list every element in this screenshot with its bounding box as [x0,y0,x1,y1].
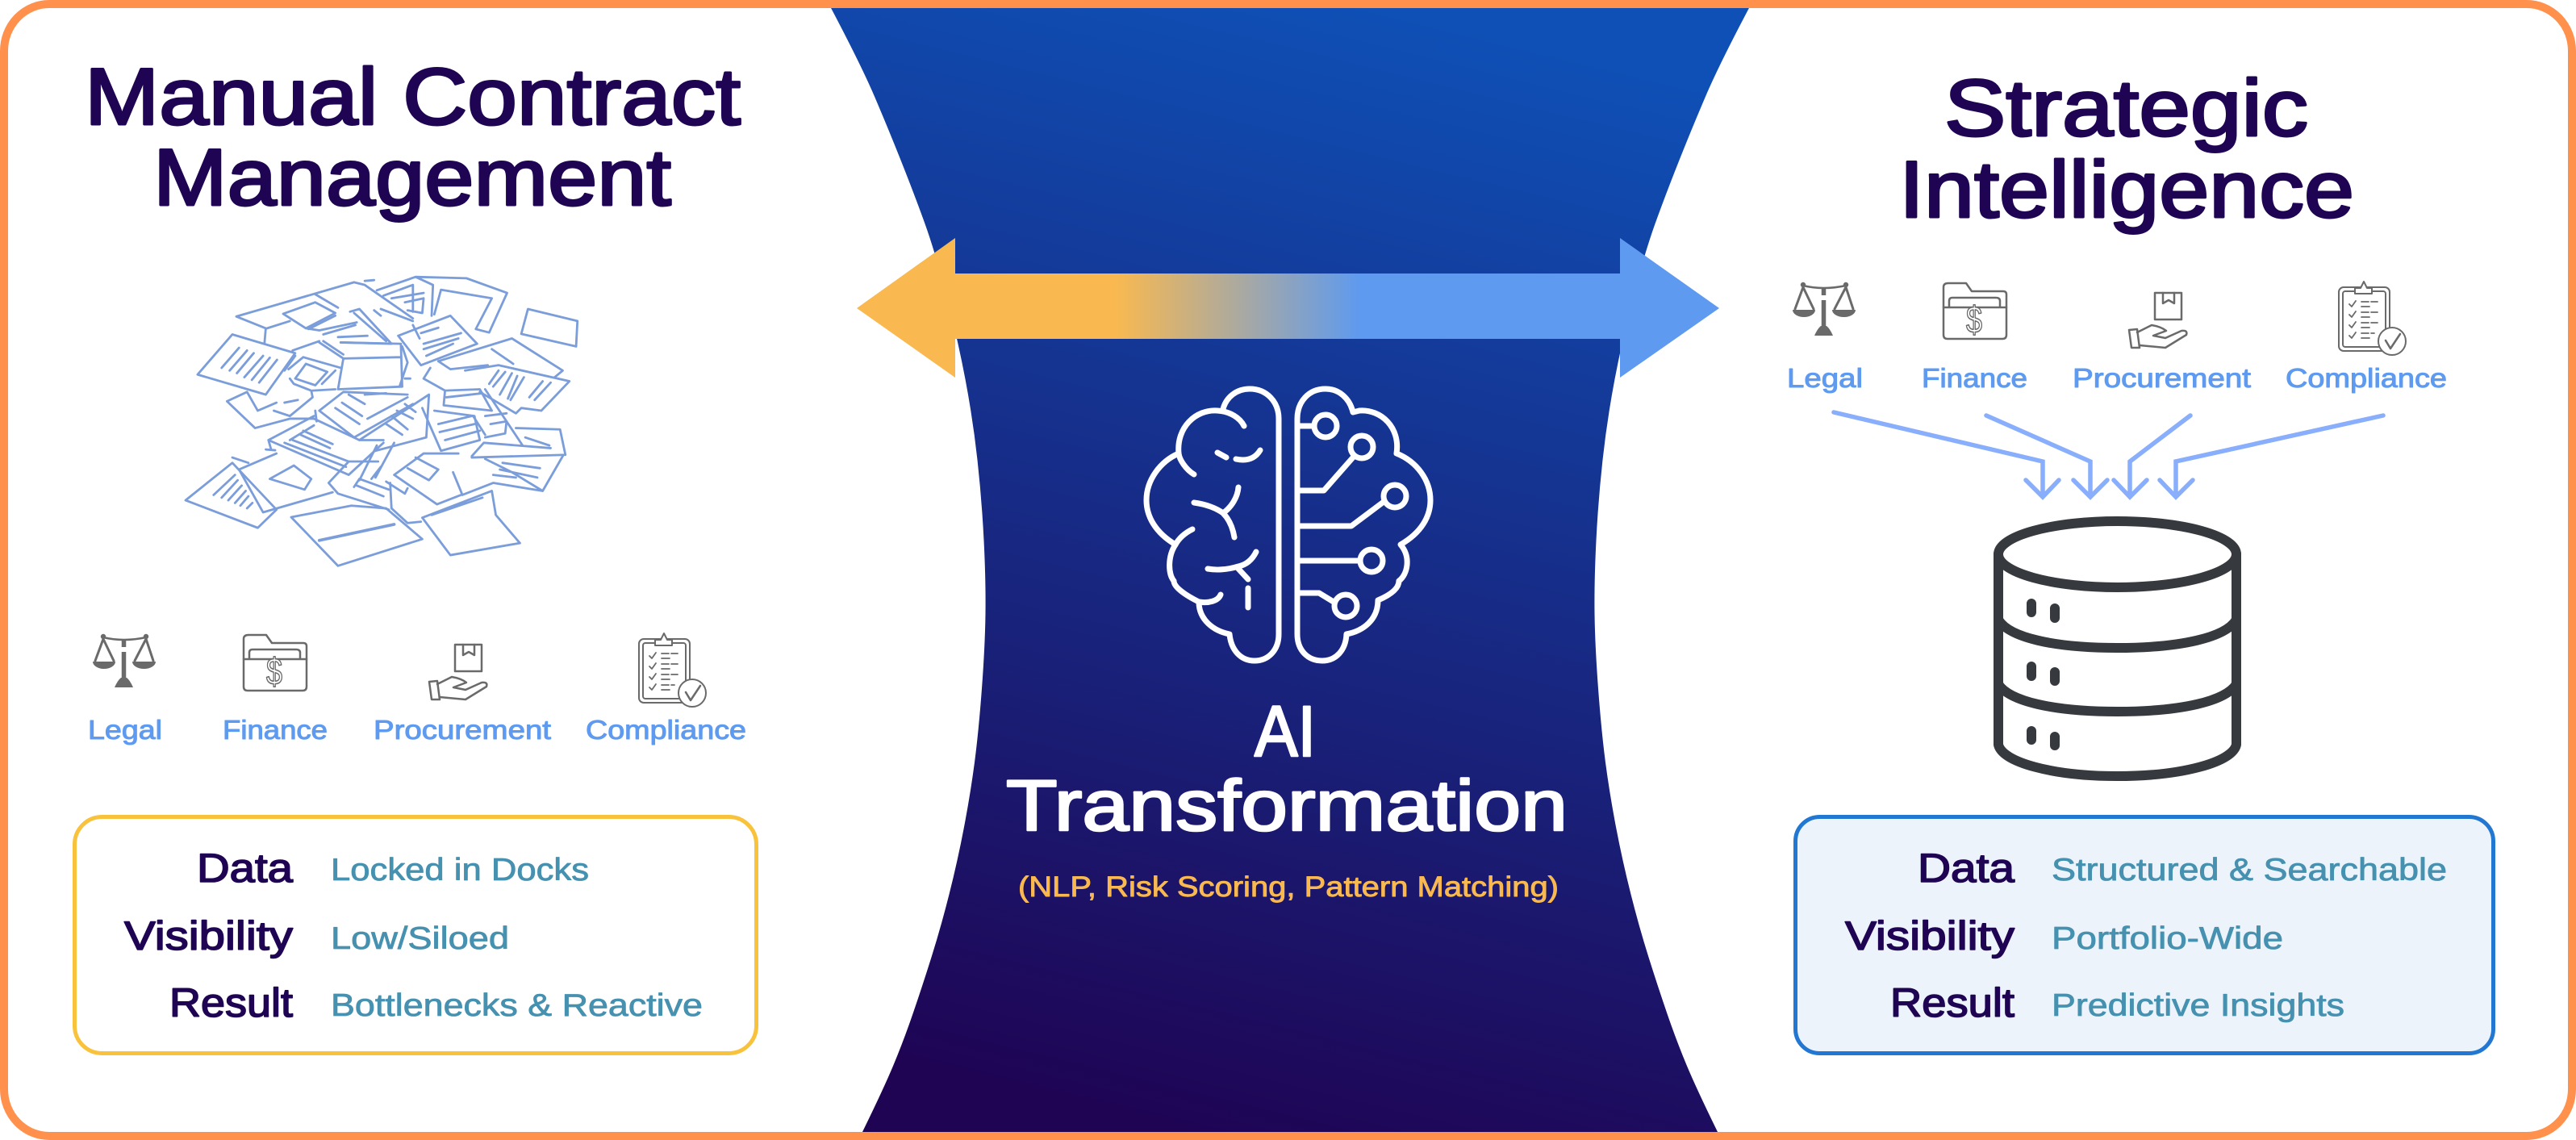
labels: right departments: Compliance [2286,363,2447,393]
heading: AI Transformation [1006,691,1568,846]
panel: manual summary box: Visibility [124,913,293,958]
illustration: scattered pile of documents [186,277,578,566]
icon: procurement hand [2129,293,2186,348]
heading: Strategic Intelligence [1899,63,2354,234]
panel: manual summary box [74,816,757,1054]
panel: strategic summary box: Result [1890,980,2014,1025]
icon row: left departments [93,633,706,707]
icon: legal scales [93,634,156,687]
labels: left departments: Legal [88,715,162,745]
panel: strategic summary box: Visibility [1845,913,2014,958]
central hourglass panel: AI Transformation [830,6,1750,1134]
labels: right departments: Finance [1922,363,2027,393]
panel: manual summary box: Locked in Docks [331,853,589,887]
panel: strategic summary box [1796,816,2493,1054]
icon: brain with circuit [1146,389,1430,661]
panel: strategic summary box: Data [1918,846,2014,891]
panel: manual summary box: Bottlenecks & Reactive [331,988,703,1023]
panel: strategic summary box: Predictive Insights [2052,988,2344,1023]
panel: strategic summary box: Structured & Searchable [2052,853,2447,887]
panel: manual summary box: Data [197,846,293,891]
heading: AI Transformation: AI [1255,691,1316,771]
heading: Strategic Intelligence: Strategic [1944,63,2308,152]
icon: compliance clipboard [639,633,706,707]
arrows: departments into database [1834,412,2383,497]
panel: manual summary box: Low/Siloed [331,921,509,956]
icon: procurement hand [429,645,486,699]
heading: Manual Contract Management: Management [153,132,671,222]
subheading: AI techniques: (NLP, Risk Scoring, Pattern Matching) [1018,871,1559,903]
icon: finance folder: $ [266,650,282,692]
labels: left departments [88,715,746,745]
labels: left departments: Procurement [374,715,551,745]
heading: Manual Contract Management [85,52,741,222]
heading: AI Transformation: Transformation [1006,765,1568,846]
icon: finance folder [244,635,307,692]
icon row: right departments [1793,282,2406,355]
icon: database cylinder [1998,521,2236,776]
panel: strategic summary box: Portfolio-Wide [2052,921,2283,956]
labels: left departments: Compliance [586,715,746,745]
labels: left departments: Finance [223,715,328,745]
icon: finance folder: $ [1966,299,1982,340]
labels: right departments: Procurement [2073,363,2251,393]
icon: finance folder [1943,283,2006,340]
icon: compliance clipboard [2339,282,2406,355]
double-headed gradient arrow [857,238,1719,378]
panel: manual summary box: Result [169,980,293,1025]
heading: Strategic Intelligence: Intelligence [1899,144,2354,234]
icon: legal scales [1793,282,1856,336]
labels: right departments [1787,363,2447,393]
heading: Manual Contract Management: Manual Contract [85,52,741,141]
labels: right departments: Legal [1787,363,1863,393]
